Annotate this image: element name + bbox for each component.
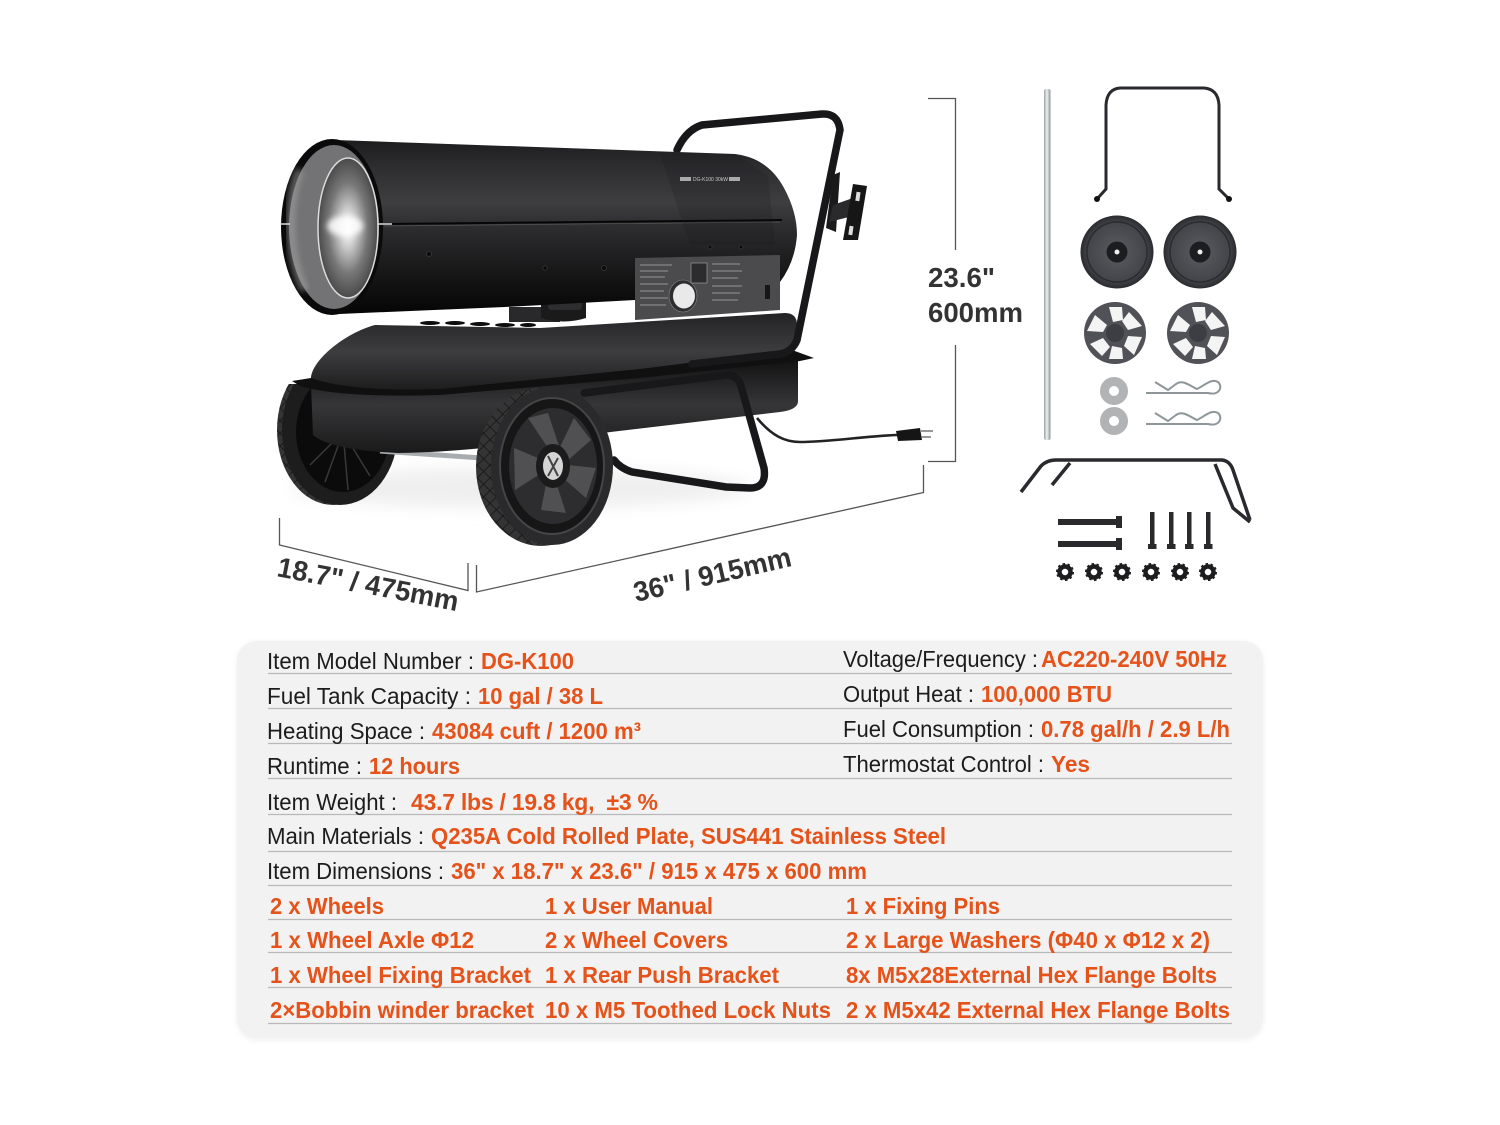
rear wheel [277,384,395,505]
front wheel [476,387,613,546]
full width specifications [267,789,946,884]
wheel cover right [1167,302,1229,364]
large washers [1104,382,1124,430]
handle bracket [826,172,867,240]
left column specifications: Runtime : [267,753,362,779]
package contents list: 2 x M5x42 External Hex Flange Bolts [846,997,1230,1023]
dimension: width 18.7 in / 475 mm [275,518,468,617]
right column specifications: Voltage/Frequency : [843,646,1038,672]
model label: DG-K100 30kW [693,177,728,183]
full width specifications: Main Materials : [267,823,424,849]
right column specifications: 100,000 BTU [981,681,1112,707]
package contents list: 1 x Rear Push Bracket [545,962,779,988]
left column specifications [267,648,641,779]
package contents list: 1 x User Manual [545,893,713,919]
dimension: length 36 in / 915 mm [476,465,924,608]
right column specifications: Thermostat Control : [843,751,1044,777]
left column specifications: Heating Space : [267,718,425,744]
fuel cap [509,300,586,322]
package contents list: 2 x Wheels [270,893,384,919]
heater barrel [335,140,797,314]
right column specifications: 0.78 gal/h / 2.9 L/h [1041,716,1230,742]
package contents list: 1 x Fixing Pins [846,893,1000,919]
left column specifications: Item Model Number : [267,648,474,674]
toothed lock nuts [1057,564,1216,580]
wheel cover left [1084,302,1146,364]
push handle [677,114,840,364]
floor shadow [290,468,750,508]
full width specifications: Item Weight : [267,789,397,815]
right column specifications: Fuel Consumption : [843,716,1034,742]
package contents list: 2×Bobbin winder bracket [270,997,534,1023]
right column specifications [843,646,1230,777]
full width specifications: Item Dimensions : [267,858,444,884]
wheel fixing bracket [1021,460,1250,522]
right column specifications: AC220-240V 50Hz [1041,646,1227,672]
barrel rivets [426,245,743,270]
seam line [382,220,782,224]
tank flange [292,350,814,396]
left column specifications: 12 hours [369,753,460,779]
left column specifications: 43084 cuft / 1200 m³ [432,718,641,744]
full width specifications: Q235A Cold Rolled Plate, SUS441 Stainless Steel [431,823,946,849]
dimension: height 23.6 in / 600 mm: 600mm [928,297,1023,328]
dimension: height 23.6 in / 600 mm [928,98,1023,462]
left column specifications: 10 gal / 38 L [478,683,603,709]
fixing pins [1146,381,1220,425]
included parts [1021,88,1250,580]
barrel mouth [280,139,392,315]
flange bolts [1058,512,1212,550]
left column specifications: Fuel Tank Capacity : [267,683,471,709]
control panel [635,255,780,320]
product illustration: kerosene forced-air heater [277,114,933,546]
fuel tank lower body [311,357,798,453]
package contents list [270,893,1230,1023]
package contents list: 1 x Wheel Fixing Bracket [270,962,531,988]
model label [660,153,775,245]
fuel tank upper shell [311,313,797,391]
specifications panel [237,641,1263,1040]
package contents list: 10 x M5 Toothed Lock Nuts [545,997,831,1023]
package contents list: 1 x Wheel Axle Φ12 [270,927,474,953]
front leg frame [584,375,764,488]
right column specifications: Output Heat : [843,681,974,707]
dimension: width 18.7 in / 475 mm: 18.7" / 475mm [275,551,461,617]
full width specifications: 36" x 18.7" x 23.6" / 915 x 475 x 600 mm [451,858,867,884]
package contents list: 8x M5x28External Hex Flange Bolts [846,962,1217,988]
wheel hub right [1164,216,1236,288]
dimension: length 36 in / 915 mm: 36" / 915mm [630,541,794,608]
package contents list: 2 x Large Washers (Φ40 x Φ12 x 2) [846,927,1210,953]
wheel hub left [1080,216,1154,288]
power cord and plug [757,418,933,442]
dimension: height 23.6 in / 600 mm: 23.6" [928,262,995,293]
tank top vents [420,321,536,327]
right column specifications: Yes [1051,751,1090,777]
axle [380,451,482,458]
package contents list: 2 x Wheel Covers [545,927,728,953]
full width specifications: 43.7 lbs / 19.8 kg, ±3 % [411,789,658,815]
wheel axle rod [1044,89,1050,440]
left column specifications: DG-K100 [481,648,574,674]
rear push bracket [1094,88,1232,202]
